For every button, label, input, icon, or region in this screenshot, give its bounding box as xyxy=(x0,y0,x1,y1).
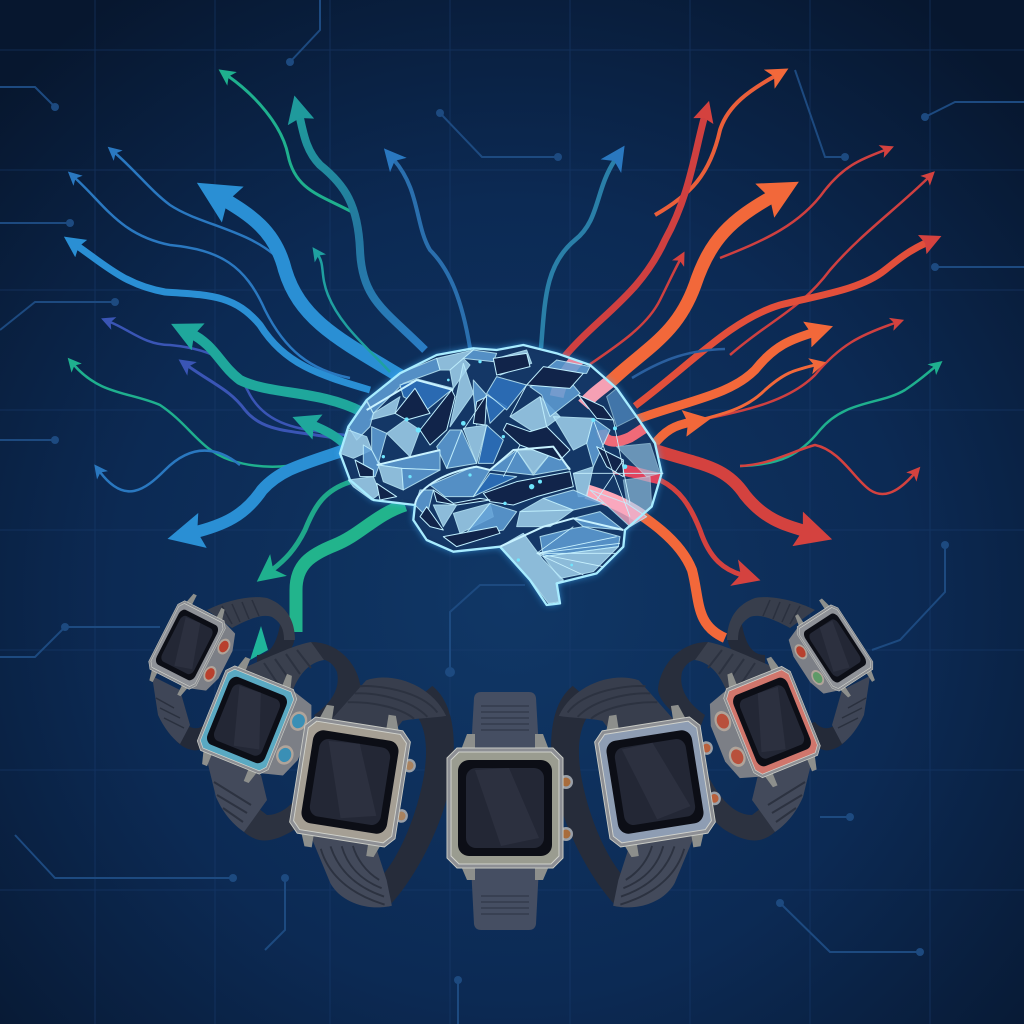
arrow: blue thin far xyxy=(75,178,350,378)
arrow: red thin inner xyxy=(570,260,680,378)
watch: centre xyxy=(447,692,573,930)
arrow: indigo thin upper xyxy=(110,322,345,435)
arrow: blue thin inner right xyxy=(632,349,725,378)
arrow: green thin far xyxy=(74,365,335,467)
arrow: orange thin xyxy=(680,365,815,425)
arrow: red lower xyxy=(660,480,742,575)
watch: second right xyxy=(658,642,828,840)
arrow: red thin mid xyxy=(700,323,895,420)
arrow: teal blue medium xyxy=(299,114,425,350)
arrow: blue thin upper xyxy=(115,153,280,260)
brain glow xyxy=(340,345,662,605)
arrow: orange thin top xyxy=(655,76,775,215)
arrow: orange medium xyxy=(635,332,815,420)
arrow: teal lower xyxy=(272,482,350,570)
arrow: blue medium xyxy=(76,245,370,390)
arrow: green thin right xyxy=(740,367,935,466)
brain facets xyxy=(340,350,660,603)
arrow: blue thick lower xyxy=(192,450,345,533)
arrows: left fan xyxy=(74,76,470,660)
brain silhouette xyxy=(340,345,662,605)
arrow: red thin upper xyxy=(720,150,885,258)
arrow: blue centre left xyxy=(394,160,470,348)
arrow: green thin top xyxy=(228,76,352,212)
arrow: orange thick xyxy=(600,195,775,392)
arrow: teal thick xyxy=(190,333,362,412)
watch: third left xyxy=(278,666,465,916)
arrow: red medium xyxy=(565,115,705,356)
arrow: red thin far xyxy=(730,178,928,355)
arrow: orange short xyxy=(652,422,692,447)
arrow: teal short xyxy=(310,424,348,447)
arrow: red thick xyxy=(655,450,808,532)
arrow: teal thin inner xyxy=(318,255,390,372)
watch: far left xyxy=(141,590,295,750)
watch: third right xyxy=(540,669,728,916)
arrow: thick blue xyxy=(222,198,400,376)
arrows seen through brain xyxy=(557,357,667,530)
arrow: blue thin loop xyxy=(100,451,240,491)
arrow: teal head behind watch xyxy=(250,626,268,660)
arrows: right fan xyxy=(541,76,935,638)
arrow: red orange medium xyxy=(635,242,928,406)
watch: far right xyxy=(727,594,882,750)
watch: second left xyxy=(190,642,361,840)
arrow: green thick from watch xyxy=(296,505,405,632)
arrow: indigo thin lower xyxy=(188,366,345,440)
brain xyxy=(340,345,667,605)
brain nodes xyxy=(382,360,627,566)
arrow: teal blue centre right xyxy=(541,160,615,348)
brain ridges xyxy=(340,345,663,605)
arrow: red thin loop xyxy=(740,445,914,494)
arrow: orange thick from watch xyxy=(610,495,725,638)
